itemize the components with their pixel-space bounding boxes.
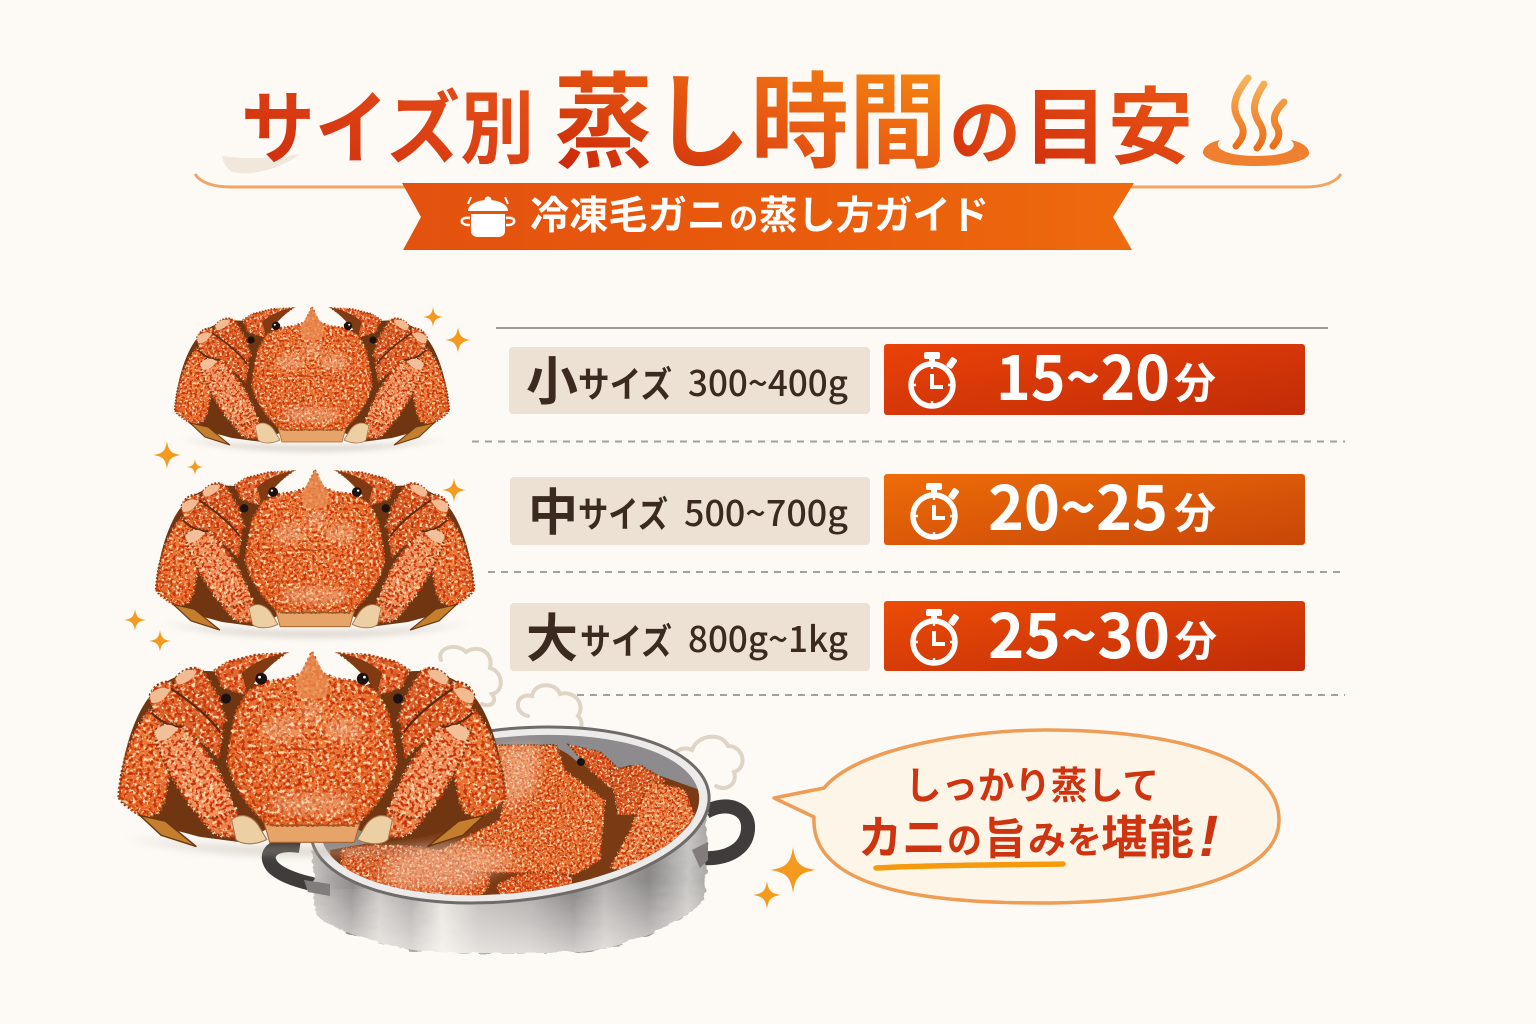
row: medium (510, 459, 1305, 548)
pot handles (269, 806, 748, 888)
pot handle bracket (304, 842, 708, 896)
callout bubble (774, 730, 1279, 903)
time bar large (884, 587, 1305, 676)
size label large: 大 (526, 597, 578, 672)
callout line 2 (858, 802, 1218, 869)
size label large (510, 597, 870, 672)
sparkles (124, 307, 816, 909)
row: large (510, 587, 1305, 676)
crab: medium (156, 470, 474, 638)
crab: small (175, 307, 449, 452)
pot body fade (312, 880, 705, 953)
callout line 2: カニ (858, 802, 946, 868)
steam clouds (440, 647, 743, 788)
time bar small: 15~20 (996, 329, 1170, 418)
icon: steam bowl (1203, 78, 1309, 166)
icon: pot (462, 196, 514, 237)
title (222, 38, 1193, 189)
time bar medium (884, 459, 1305, 548)
ribbon text: の (729, 194, 758, 238)
ribbon text (530, 185, 989, 241)
time bar small (884, 329, 1305, 418)
size label small: 300~400g (688, 356, 848, 407)
size label small: サイズ (578, 356, 672, 408)
callout line 2: 堪能 (1101, 802, 1194, 868)
callout line 2: の (947, 812, 982, 864)
callout line 2: ! (1199, 804, 1218, 869)
ribbon text: 蒸し方ガイド (759, 185, 989, 241)
time bar large: 25~30 (988, 587, 1170, 676)
time bar small: 分 (1174, 350, 1216, 411)
size label large: 800g~1kg (688, 612, 848, 663)
pot interior (313, 718, 707, 912)
size label small: 小 (526, 340, 578, 415)
title brush stroke (222, 154, 300, 173)
callout line 1: しっかり蒸して (905, 755, 1159, 810)
pot body (312, 810, 708, 953)
pot rim (302, 709, 718, 921)
callout line 2: 旨 (984, 803, 1026, 867)
title part: 蒸し時間: 蒸し時間 (554, 38, 947, 189)
size label medium (510, 473, 870, 545)
size label large: サイズ (580, 613, 672, 665)
crab: large (119, 652, 505, 856)
title part: サイズ別: サイズ別 (241, 65, 534, 181)
callout underline (876, 864, 1063, 868)
title part: 目安: 目安 (1023, 61, 1193, 182)
time bar medium: 分 (1174, 480, 1216, 541)
table rules (472, 328, 1345, 695)
time bar medium: 20~25 (988, 459, 1168, 548)
size label medium: サイズ (578, 486, 668, 538)
size label small (509, 340, 870, 415)
title part: の: の (949, 74, 1021, 179)
callout line 2: を (1067, 812, 1102, 864)
callout line 2: み (1028, 809, 1066, 864)
ribbon text: 冷凍毛ガニ (530, 185, 726, 241)
title underline (195, 174, 1341, 187)
size label medium: 中 (528, 473, 578, 545)
crab in pot (330, 745, 705, 905)
callout (774, 730, 1279, 903)
row: small (509, 329, 1305, 418)
ribbon (402, 183, 1134, 250)
time bar large: 分 (1175, 608, 1217, 669)
pot with crab (269, 709, 748, 953)
size label medium: 500~700g (684, 486, 848, 537)
